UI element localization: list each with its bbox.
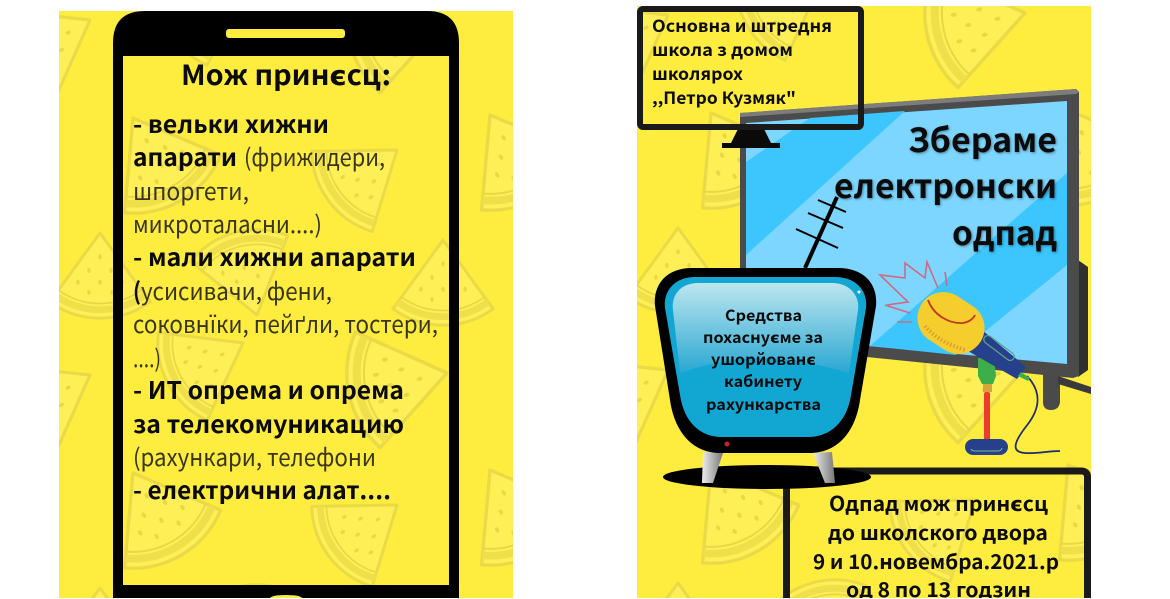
icon: monitor stand xyxy=(722,125,780,148)
phone home button xyxy=(270,595,302,598)
text block: funds note: похаснуєме за xyxy=(703,326,823,348)
text block: drop-off box xyxy=(786,471,1088,599)
text block: list of waste: соковнїки, пейґли, тостери, xyxy=(133,305,438,340)
text block: funds note: кабинету xyxy=(724,370,802,392)
text block: school name box xyxy=(640,9,861,127)
text block: list of waste: усисивачи, фени, xyxy=(141,272,332,307)
title: collecting electronic waste: Збераме xyxy=(908,114,1057,162)
text block: funds note xyxy=(703,304,823,415)
text block: school name box: ,,Петро Кузмяк" xyxy=(652,84,796,109)
title: collecting electronic waste xyxy=(834,114,1057,255)
icon: sound sparks xyxy=(880,262,947,322)
text block: list of waste: (рахункари, телефони xyxy=(133,438,376,473)
icon: microphone xyxy=(907,282,1060,455)
text block: list of waste: - вельки хижни xyxy=(133,105,329,140)
text block: list of waste: микроталасни....) xyxy=(133,205,322,240)
title: collecting electronic waste: електронски xyxy=(834,160,1057,208)
icon: antenna xyxy=(796,197,846,268)
text block: funds note: рахункарства xyxy=(706,393,821,415)
text block: list of waste xyxy=(133,105,438,506)
title: collecting electronic waste: одпад xyxy=(952,207,1057,255)
text block: school name box: школа з домом xyxy=(652,36,793,61)
heading: can bring: Мож принєсц: xyxy=(181,54,391,94)
icon: retro television xyxy=(655,268,876,489)
text block: list of waste: ( xyxy=(133,272,141,307)
text block: drop-off box: Одпад мож принєсц xyxy=(829,488,1048,517)
text block: list of waste: - мали хижни апарати xyxy=(133,238,416,273)
icon: phone frame xyxy=(113,11,459,598)
text block: list of waste: (фрижидери, xyxy=(244,138,385,173)
text block: funds note: Средства xyxy=(725,304,802,326)
panel: right poster xyxy=(637,6,1091,598)
text block: school name box: Основна и штредня xyxy=(652,12,832,37)
phone speaker xyxy=(226,29,345,38)
text block: school name box: школярох xyxy=(652,60,743,85)
text block: drop-off box: до школского двора xyxy=(828,517,1048,546)
panel: left phone poster xyxy=(59,11,513,598)
text block: list of waste: апарати xyxy=(133,138,237,173)
text block: list of waste: шпоргети, xyxy=(133,172,249,207)
text block: list of waste: ....) xyxy=(133,339,161,374)
text block: drop-off box: 9 и 10.новембра.2021.р xyxy=(813,546,1059,575)
text block: list of waste: - електрични алат.... xyxy=(133,471,391,506)
icon: big flat television xyxy=(740,89,1091,410)
text block: funds note: ушорйованє xyxy=(711,348,816,370)
text block: list of waste: - ИТ опрема и опрема xyxy=(133,371,404,406)
text block: list of waste: за телекомуникацию xyxy=(133,405,404,440)
